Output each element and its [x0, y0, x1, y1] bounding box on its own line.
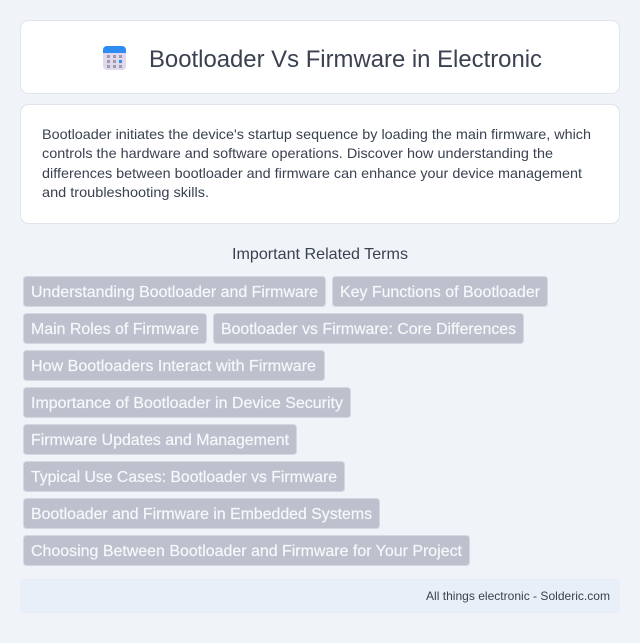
panel: description	[20, 104, 620, 224]
tag	[24, 350, 324, 380]
tag: Bootloader vs Firmware: Core Differences	[221, 321, 516, 338]
panel: related term tags	[24, 276, 548, 566]
title: Bootloader Vs Firmware in Electronic	[149, 46, 542, 73]
tag: Importance of Bootloader in Device Security	[31, 395, 343, 412]
tag: Key Functions of Bootloader	[340, 284, 541, 301]
footer	[20, 579, 620, 613]
tag	[24, 388, 350, 418]
icon: calendar	[103, 46, 126, 70]
panel: title header	[20, 20, 620, 94]
tag	[24, 462, 344, 492]
tag	[24, 276, 326, 306]
tag: How Bootloaders Interact with Firmware	[31, 358, 316, 375]
tag: Typical Use Cases: Bootloader vs Firmware	[31, 469, 337, 486]
description text	[42, 126, 591, 200]
heading: related terms: Important Related Terms	[232, 246, 408, 263]
tag	[24, 498, 380, 528]
description text: differences between bootloader and firmware can enhance your device management	[42, 165, 582, 181]
tag: Firmware Updates and Management	[31, 432, 290, 449]
description text: and troubleshooting skills.	[42, 184, 209, 200]
tag: Main Roles of Firmware	[31, 321, 199, 338]
tag	[24, 424, 296, 454]
footer: All things electronic - Solderic.com	[426, 589, 610, 603]
tag	[214, 314, 524, 344]
description text: controls the hardware and software operations. Discover how understanding the	[42, 145, 553, 161]
tag	[24, 314, 206, 344]
tag: Choosing Between Bootloader and Firmware for Your Project	[31, 543, 463, 560]
tag	[332, 276, 548, 306]
description text: Bootloader initiates the device's startup sequence by loading the main firmware, which	[42, 126, 591, 142]
tag: Understanding Bootloader and Firmware	[31, 284, 318, 301]
tag	[24, 536, 470, 566]
tag: Bootloader and Firmware in Embedded Systems	[31, 506, 372, 523]
